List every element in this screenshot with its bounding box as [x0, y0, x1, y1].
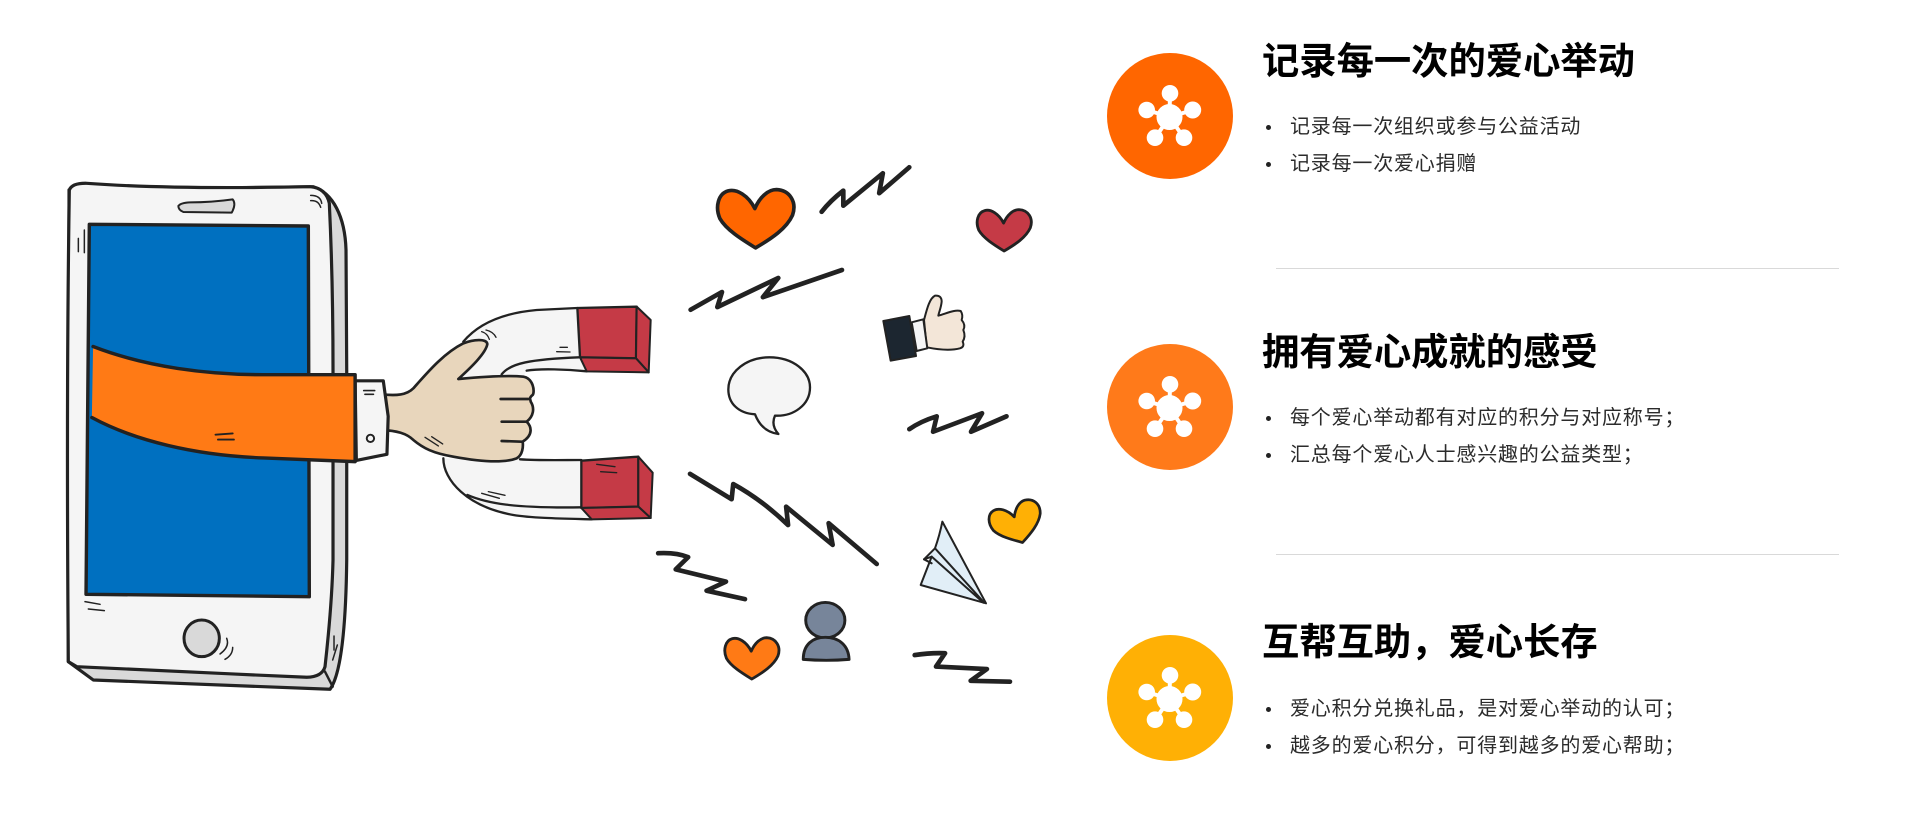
icon: person — [803, 602, 849, 660]
bullet text: 记录每一次组织或参与公益活动 — [1290, 116, 1581, 138]
icon: orange network circle — [1107, 53, 1233, 179]
hand — [382, 340, 534, 461]
heading: 互帮互助，爱心长存 — [1262, 621, 1598, 663]
icon: yellow network circle — [1107, 635, 1233, 761]
icon: yellow heart — [986, 497, 1048, 550]
icon: paper plane — [921, 522, 986, 603]
bullet text: 爱心积分兑换礼品，是对爱心举动的认可； — [1290, 698, 1685, 720]
phone — [67, 183, 347, 689]
panel: mutual help — [1107, 621, 1685, 761]
heading: 拥有爱心成就的感受 — [1262, 330, 1598, 372]
icon: thumbs up — [883, 296, 965, 361]
icon: lightning strokes — [658, 167, 1010, 682]
icon: light orange network circle — [1107, 344, 1233, 470]
sleeve — [92, 347, 355, 462]
heading: 记录每一次的爱心举动 — [1262, 40, 1635, 82]
panel: sense of achievement — [1107, 330, 1685, 470]
cuff — [355, 381, 388, 460]
bullet text: 汇总每个爱心人士感兴趣的公益类型； — [1290, 444, 1644, 466]
icon: small orange heart — [725, 638, 779, 679]
bullet text: 每个爱心举动都有对应的积分与对应称号； — [1290, 407, 1685, 429]
icon: speech bubble — [728, 357, 810, 434]
arm with cuff and hand — [92, 340, 534, 462]
magnet — [443, 307, 653, 519]
icon: orange heart — [718, 190, 794, 248]
panel: record every act of love — [1107, 40, 1635, 179]
icon: red heart — [977, 210, 1031, 251]
bullet text: 越多的爱心积分，可得到越多的爱心帮助； — [1290, 734, 1685, 756]
bullet text: 记录每一次爱心捐赠 — [1290, 153, 1477, 175]
